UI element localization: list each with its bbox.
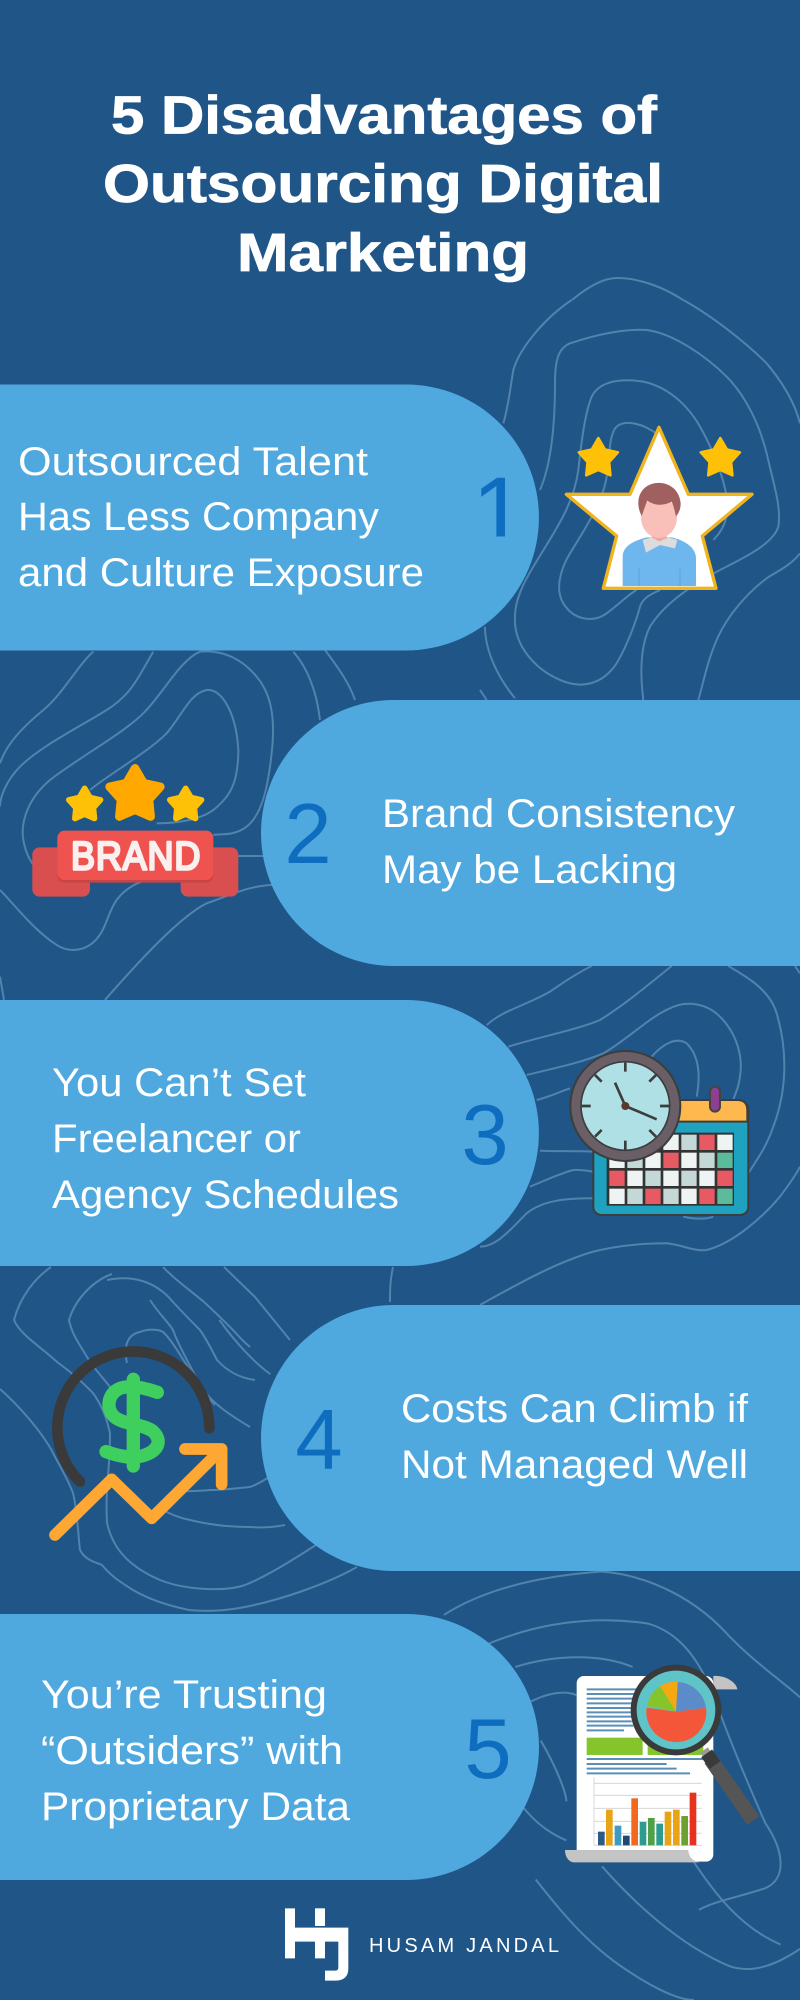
text block 1: Has Less Company [18, 495, 379, 539]
text block 5 [41, 1673, 351, 1829]
text block 4: Not Managed Well [401, 1443, 748, 1487]
text block 5: Proprietary Data [41, 1785, 351, 1829]
text block 3: Agency Schedules [52, 1173, 399, 1217]
pill 1 [0, 384, 539, 650]
text block 4: Costs Can Climb if [401, 1387, 749, 1431]
text block 3 [52, 1061, 399, 1217]
panel: item 3 [0, 1000, 539, 1266]
title: Marketing [237, 223, 529, 283]
panel: item 4 [261, 1305, 800, 1571]
pill 4 [261, 1305, 800, 1571]
title: Outsourcing Digital [103, 154, 663, 214]
icon: brand badge: BRAND [71, 833, 200, 879]
text block 1: Outsourced Talent [18, 440, 368, 484]
text block 4 [401, 1387, 749, 1487]
number 1: 1 [472, 457, 526, 566]
title: 5 Disadvantages of [111, 86, 658, 146]
icon: brand badge [32, 768, 238, 897]
text block 1: and Culture Exposure [18, 551, 424, 595]
text block 5: “Outsiders” with [41, 1729, 343, 1773]
text block 5: You’re Trusting [41, 1673, 327, 1717]
icon: person in star [566, 427, 752, 588]
logo wordmark: HUSAM JANDAL [369, 1935, 559, 1957]
text block 2: May be Lacking [382, 848, 677, 892]
panel: item 2 [261, 700, 800, 966]
pill 5 [0, 1614, 539, 1880]
text block 2 [382, 792, 735, 892]
panel: item 1 [0, 384, 539, 650]
panel: item 5 [0, 1614, 539, 1880]
text block 3: You Can’t Set [52, 1061, 306, 1105]
number 5: 5 [464, 1702, 512, 1797]
icon: rising costs [55, 1352, 222, 1535]
title [103, 86, 663, 283]
number 3: 3 [461, 1088, 509, 1183]
icon: clock and calendar [570, 1051, 748, 1215]
text block 1 [18, 440, 424, 595]
logo mark [285, 1908, 348, 1981]
text block 3: Freelancer or [52, 1117, 301, 1161]
text block 2: Brand Consistency [382, 792, 735, 836]
number 4: 4 [295, 1393, 343, 1488]
pill 2 [261, 700, 800, 966]
pill 3 [0, 1000, 539, 1266]
icon: report under magnifier [565, 1668, 753, 1862]
logo: Husam Jandal [285, 1908, 559, 1981]
number 2: 2 [284, 787, 332, 882]
